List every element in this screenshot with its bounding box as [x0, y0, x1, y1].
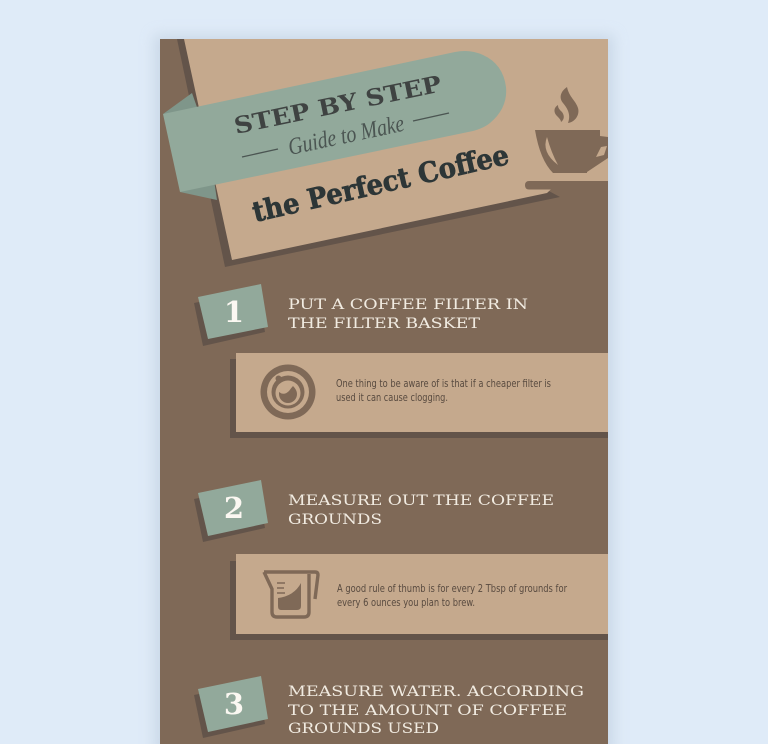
- title: STEP BY STEP: [232, 71, 444, 140]
- icon: coffee filter: [260, 364, 316, 420]
- step 1: [194, 284, 608, 438]
- header panel: [163, 39, 608, 267]
- heading 2: [288, 493, 554, 528]
- heading 3: TO THE AMOUNT OF COFFEE: [288, 703, 567, 719]
- heading 1: PUT A COFFEE FILTER IN: [288, 297, 528, 313]
- text 2: [337, 583, 568, 609]
- text 1: used it can cause clogging.: [336, 392, 448, 404]
- heading 1: THE FILTER BASKET: [288, 316, 481, 332]
- panel 1: [230, 353, 608, 438]
- number badge 2: 2: [224, 491, 244, 525]
- number badge 1: [194, 284, 268, 346]
- title: the Perfect Coffee: the Perfect Coffee: [249, 138, 512, 229]
- saucer: [525, 181, 608, 190]
- heading 2: MEASURE OUT THE COFFEE: [288, 493, 554, 509]
- text 1: [336, 378, 551, 404]
- number badge 3: [194, 676, 268, 738]
- text 1: One thing to be aware of is that if a cheaper filter is: [336, 378, 551, 390]
- heading 1: [288, 297, 528, 332]
- icon: measuring cup: [264, 572, 318, 617]
- heading 3: [288, 684, 584, 737]
- step 2: [194, 480, 608, 640]
- icon: coffee cup: [535, 87, 608, 173]
- number badge 2: [194, 480, 268, 542]
- heading 2: GROUNDS: [288, 512, 382, 528]
- text 2: A good rule of thumb is for every 2 Tbsp of grounds for: [337, 583, 568, 595]
- number badge 1: 1: [224, 295, 244, 329]
- text 2: every 6 ounces you plan to brew.: [337, 597, 475, 609]
- step 3: [194, 676, 584, 738]
- subtitle: Guide to Make: [286, 111, 407, 161]
- subtitle: [242, 111, 449, 161]
- ribbon: [163, 51, 506, 200]
- heading 3: MEASURE WATER. ACCORDING: [288, 684, 584, 700]
- heading 3: GROUNDS USED: [288, 721, 439, 737]
- panel 2: [230, 554, 608, 640]
- number badge 3: 3: [224, 687, 244, 721]
